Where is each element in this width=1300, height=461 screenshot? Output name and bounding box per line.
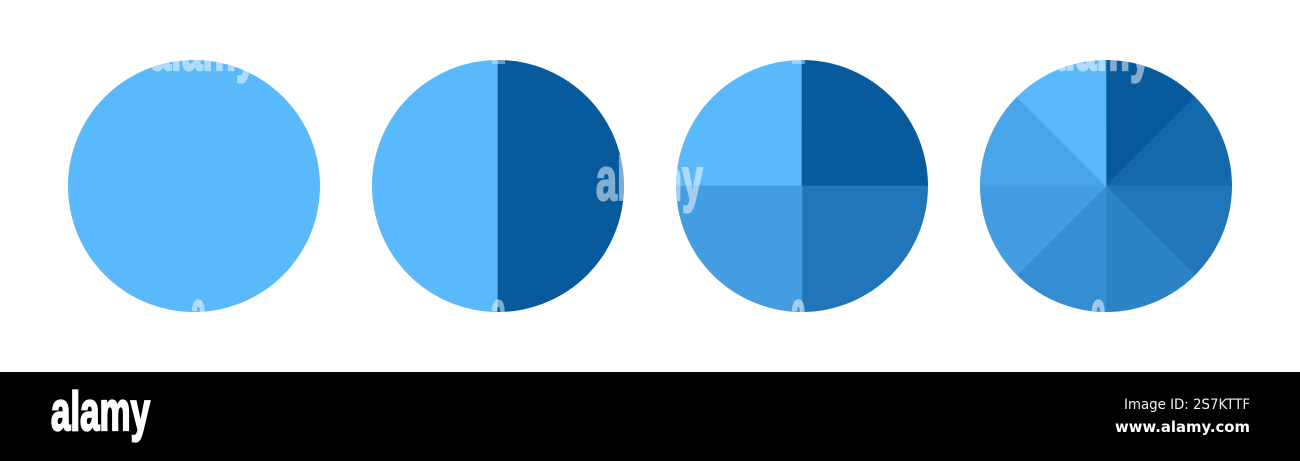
circle: divided into quarters: a bbox=[791, 279, 806, 346]
circle: divided into halves bbox=[372, 60, 624, 312]
circle: divided into quarters: alamy bbox=[596, 146, 703, 213]
footer logo: alamy bbox=[51, 380, 150, 442]
circle: divided into quarters bbox=[676, 60, 928, 312]
circle: divided into halves: alamy bbox=[596, 146, 703, 213]
circle: divided into eighths: a bbox=[1091, 279, 1106, 346]
circle: whole bbox=[68, 60, 320, 312]
footer bar bbox=[0, 372, 1300, 461]
circle: divided into eighths: alamy bbox=[1044, 16, 1151, 83]
circle: whole: a bbox=[191, 279, 206, 346]
website: www.alamy.com bbox=[1115, 418, 1250, 436]
circle: divided into eighths bbox=[980, 60, 1232, 312]
image id: Image ID: 2S7KTTF bbox=[1124, 397, 1250, 413]
circle: whole: alamy bbox=[150, 16, 257, 83]
circle: divided into halves: a bbox=[491, 279, 506, 346]
